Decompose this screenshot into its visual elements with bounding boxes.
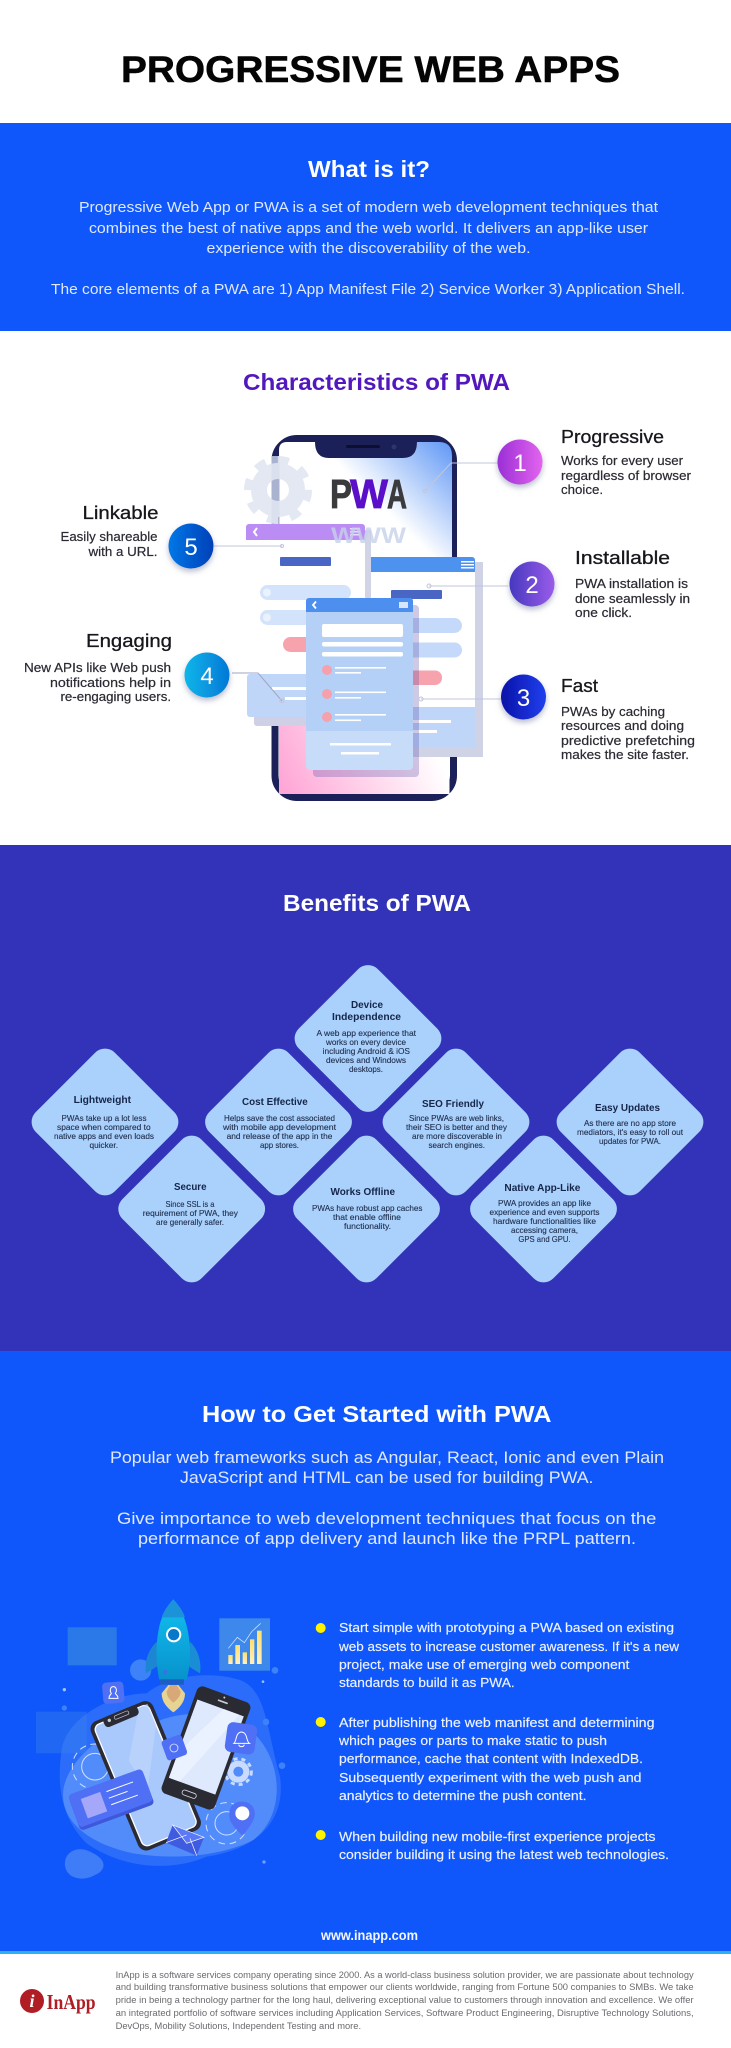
footer accent line [0,1951,731,1954]
text block: intro: JavaScript and HTML can be used for building PWA. [180,1469,594,1487]
panel: how to get started [0,1351,731,1951]
diamond: device independence: desktops. [349,1064,383,1074]
bullet 2: analytics to determine the push content. [339,1788,586,1803]
icon: number 3: 3 [517,685,530,712]
diamond: secure: Since SSL is a [166,1199,215,1209]
item: installable: PWA installation is [575,577,688,591]
diamond: seo friendly: Since PWAs are web links, [409,1113,504,1123]
card: back right [365,557,483,757]
diamond: native app-like [464,1130,623,1288]
diamond: device independence: Independence [332,1012,401,1023]
item: engaging: Engaging [86,630,172,651]
diamond: device independence: works on every device [325,1037,406,1047]
card: front [306,598,419,777]
heading: how to get started: How to Get Started with PWA [202,1401,552,1427]
rocket [146,1599,200,1712]
text block: definition: combines the best of native apps and the web world. It delivers an app-like user [89,220,648,237]
bullet 2: which pages or parts to make static to push [338,1733,607,1748]
bullet 2: performance, cache that content with IndexedDB. [339,1751,643,1766]
bullet 3 [316,1829,669,1862]
diamond: easy updates: updates for PWA. [599,1136,661,1146]
heading: benefits: Benefits of PWA [283,890,471,916]
icon: number 1: 1 [513,450,527,477]
item: progressive [498,426,691,497]
connector lines [214,463,508,702]
item: installable: done seamlessly in [575,592,690,606]
diamond: native app-like: hardware functionalities like [493,1216,596,1226]
diamond: works offline: functionality. [344,1221,391,1231]
bullet 2: Subsequently experiment with the web push and [339,1770,642,1785]
text block: intro: Popular web frameworks such as Angular, React, Ionic and even Plain [110,1449,664,1467]
icon: gear [248,460,308,520]
diamond: cost effective: Cost Effective [242,1097,308,1108]
item: fast: Fast [561,675,598,696]
diamond: seo friendly [377,1043,535,1201]
diamond: cost effective [199,1043,358,1201]
item: progressive: Works for every user [561,454,683,468]
text block: intro: performance of app delivery and launch like the PRPL pattern. [138,1530,636,1548]
location pin [229,1802,255,1836]
diamond: easy updates: As there are no app store [584,1118,676,1128]
logo: InApp [20,1989,96,2014]
icon: number 5: 5 [184,534,198,561]
item: engaging [24,630,230,704]
logo: InApp: i [29,1991,35,2011]
bullet 1: project, make use of emerging web component [339,1657,630,1672]
icon: number 5 [168,524,214,568]
diamond: secure: Secure [174,1182,207,1193]
bullet 1: standards to build it as PWA. [339,1675,515,1690]
phone body [272,438,454,798]
diamond: seo friendly: are more discoverable in [412,1131,502,1141]
footer text: and building transformative business solutions that empower our clients worldwide, ranging from Fortune 500 companies to SMBs. We take [116,1982,694,1992]
PWA logo: P [330,471,352,517]
icon: number 3 [501,674,546,720]
diamond: lightweight: quicker. [90,1140,118,1150]
footer text: an integrated portfolio of software services including Application Services, Software Product Engineering, Disruptive Technology Solutions, [116,2008,694,2018]
bullet 1: Start simple with prototyping a PWA based on existing [339,1620,674,1635]
diamond: lightweight: native apps and even loads [54,1131,154,1141]
title: PROGRESSIVE WEB APPS [121,49,620,90]
bullet 2 [316,1715,654,1803]
PWA logo [330,471,407,517]
panel: benefits [0,845,731,1351]
right phone [160,1685,252,1811]
diamond: easy updates: mediators, it's easy to roll out [577,1127,684,1137]
phone illustration [246,438,483,798]
diamond: lightweight: PWAs take up a lot less [62,1113,146,1123]
PWA logo: W [350,471,388,517]
diamond: secure [113,1130,271,1288]
icon: number 4 [184,652,230,698]
bullet 1: web assets to increase customer awareness. If it's a new [338,1639,680,1654]
item: fast: PWAs by caching [561,705,665,719]
diamond: easy updates: Easy Updates [595,1103,660,1114]
diamond: works offline: that enable offline [333,1212,401,1222]
bullet 3: consider building it using the latest web technologies. [339,1847,669,1862]
heading: what is it: What is it? [308,156,430,182]
diamond: cost effective: with mobile app development [222,1122,337,1132]
item: fast: resources and doing [561,719,684,733]
diamond: device independence [289,959,447,1118]
diamond: cost effective: and release of the app in the [227,1131,333,1141]
text block: intro [110,1449,664,1548]
item: progressive: choice. [561,483,603,497]
bullet 2: After publishing the web manifest and determining [339,1715,654,1730]
diamond: secure: requirement of PWA, they [143,1208,239,1218]
icon: number 1 [498,440,542,484]
diamond: cost effective: Helps save the cost associated [224,1113,335,1123]
text block: definition: Progressive Web App or PWA is a set of modern web development techniques that [79,199,659,216]
WWW watermark: WWW [331,523,406,548]
bullet 1 [316,1620,680,1690]
panels [68,1627,117,1665]
item: engaging: notifications help in [50,676,171,690]
diamond: works offline: Works Offline [330,1187,395,1198]
icon: number 2 [510,562,554,606]
item: installable: one click. [575,606,632,620]
envelope [166,1825,204,1856]
diamond: device independence: Device [351,1000,383,1011]
diamond: native app-like: experience and even supports [490,1207,600,1217]
diamond: lightweight: space when compared to [57,1122,151,1132]
text block: definition [51,199,685,298]
diamond: native app-like: accessing camera, [511,1225,578,1235]
diamond: lightweight [26,1043,184,1201]
background blobs [60,1675,281,1866]
website url: www.inapp.com [320,1928,418,1943]
diamond: native app-like: PWA provides an app like [498,1198,591,1208]
footer text: DevOps, Mobility Solutions, Independent Testing and more. [116,2021,361,2031]
diamond: seo friendly: SEO Friendly [422,1099,484,1110]
item: fast [501,674,695,762]
left phone [88,1698,204,1853]
icon tiles [102,1681,258,1761]
diamond: native app-like: GPS and GPU. [518,1234,571,1244]
diamond: cost effective: app stores. [260,1140,299,1150]
diamond: lightweight: Lightweight [74,1095,132,1106]
text block: definition: The core elements of a PWA are 1) App Manifest File 2) Service Worker 3) Application Shell. [51,281,685,298]
illustration: rocket and phones [36,1599,285,1879]
item: progressive: Progressive [561,426,664,447]
item: progressive: regardless of browser [561,469,691,483]
card icon [68,1768,155,1831]
logo: InApp: InApp [47,1990,96,2014]
footer text: pride in being a technology partner for the long haul, delivering exceptional value to customers through innovation and excellence. We offer [116,1995,694,2005]
card: back left [246,524,371,726]
bullet list [316,1620,680,1862]
panel: what is it [0,123,731,331]
item: linkable: Linkable [82,502,158,523]
heading: characteristics: Characteristics of PWA [243,369,510,395]
icon: number 2: 2 [525,572,539,599]
diamond: native app-like: Native App-Like [504,1183,581,1194]
chart [228,1631,262,1664]
diamond: device independence: devices and Windows [326,1055,406,1065]
diamond: works offline: PWAs have robust app caches [312,1203,422,1213]
item: linkable: with a URL. [87,545,158,559]
item: linkable: Easily shareable [60,530,158,544]
item: installable [510,547,690,620]
item: installable: Installable [575,547,670,568]
item: engaging: re-engaging users. [60,690,171,704]
text block: definition: experience with the discoverability of the web. [206,240,530,257]
footer text: InApp is a software services company operating since 2000. As a world-class business solution provider, we are passionate about technology [116,1970,694,1980]
diamond: device independence: including Android & iOS [323,1046,410,1056]
diamond: seo friendly: search engines. [428,1140,485,1150]
diamond: device independence: A web app experience that [316,1028,417,1038]
footer text [116,1970,694,2031]
bullet 3: When building new mobile-first experience projects [339,1829,656,1844]
diamond: secure: are generally safer. [156,1217,224,1227]
PWA logo: A [387,471,407,517]
diamond: easy updates [551,1043,709,1201]
icon: number 4: 4 [200,663,214,690]
item: fast: makes the site faster. [561,748,689,762]
diamond: works offline [287,1130,446,1288]
item: engaging: New APIs like Web push [24,661,171,675]
item: linkable [60,502,214,568]
diamond: seo friendly: their SEO is better and they [406,1122,508,1132]
text block: intro: Give importance to web development techniques that focus on the [117,1510,656,1528]
gears [72,1744,247,1844]
item: fast: predictive prefetching [561,734,695,748]
